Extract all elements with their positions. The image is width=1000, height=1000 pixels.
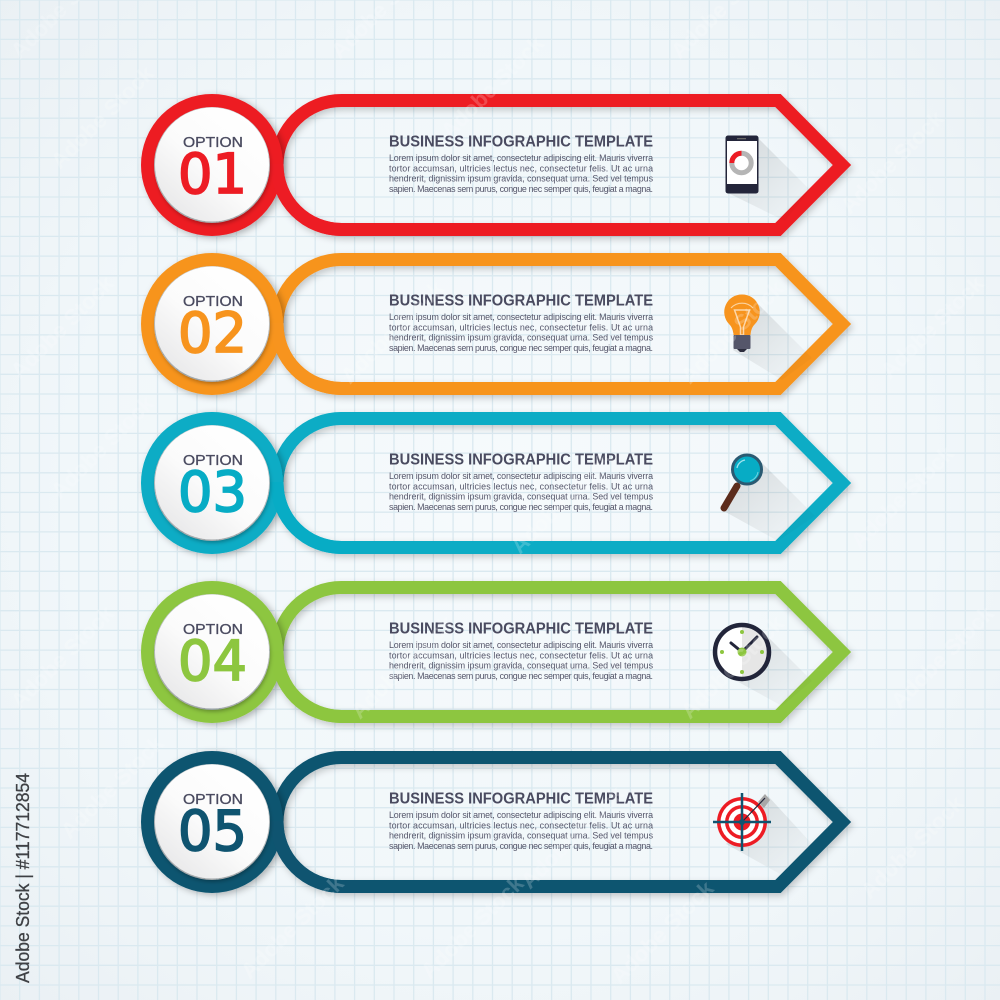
number 05: 05 xyxy=(178,799,247,863)
watermark text: Adobe Stock xyxy=(886,600,999,714)
disc 05 xyxy=(155,764,269,878)
option label 01: OPTION xyxy=(183,134,243,151)
watermark text: Adobe Stock xyxy=(606,875,719,989)
watermark text: Adobe Stock xyxy=(846,440,959,554)
option 04 row xyxy=(148,588,842,716)
watermark text: Adobe Stock xyxy=(516,780,629,894)
body text 01: Lorem ipsum dolor sit amet, consectetur adipiscing elit. Mauris viverra xyxy=(389,153,653,163)
option label 05: OPTION xyxy=(183,791,243,808)
watermark text: Adobe Stock xyxy=(876,270,989,384)
option label 03: OPTION xyxy=(183,452,243,469)
body text 05: tortor accumsan, ultricies lectus nec, consectetur felis. Ut ac urna xyxy=(389,820,653,830)
body text 02: hendrerit, dignissim ipsum gravida, consequat urna. Sed vel tempus xyxy=(389,333,654,343)
option 05 row xyxy=(148,758,842,886)
body text 05: sapien. Maecenas sem purus, congue nec semper quis, feugiat a magna. xyxy=(389,841,653,851)
body text 04: sapien. Maecenas sem purus, congue nec semper quis, feugiat a magna. xyxy=(389,671,653,681)
watermark text: Adobe Stock xyxy=(56,730,169,844)
body text 04: tortor accumsan, ultricies lectus nec, consectetur felis. Ut ac urna xyxy=(389,650,653,660)
ring 04 xyxy=(148,588,276,716)
ring 05 xyxy=(148,758,276,886)
watermark text: Adobe Stock xyxy=(676,610,789,724)
watermark text: Adobe Stock xyxy=(336,275,449,389)
number 03: 03 xyxy=(178,460,247,524)
body text 01 xyxy=(389,153,654,194)
ring 01 xyxy=(148,100,276,230)
disc 02 xyxy=(155,266,269,380)
option 02 row xyxy=(148,260,842,388)
body text 02: Lorem ipsum dolor sit amet, consectetur adipiscing elit. Mauris viverra xyxy=(389,312,653,322)
watermark text: Adobe Stock xyxy=(506,445,619,559)
body text 02: sapien. Maecenas sem purus, congue nec semper quis, feugiat a magna. xyxy=(389,343,653,353)
heading 01: BUSINESS INFOGRAPHIC TEMPLATE xyxy=(389,134,653,150)
arrow overlap 05 xyxy=(276,821,341,893)
arrow outline 01 xyxy=(277,100,842,230)
arrow outline 03 xyxy=(277,418,842,548)
body text 01: hendrerit, dignissim ipsum gravida, consequat urna. Sed vel tempus xyxy=(389,174,654,184)
body text 02: tortor accumsan, ultricies lectus nec, consectetur felis. Ut ac urna xyxy=(389,322,653,332)
watermark text: Adobe Stock xyxy=(856,790,969,904)
body text 04: hendrerit, dignissim ipsum gravida, consequat urna. Sed vel tempus xyxy=(389,661,654,671)
arrow outline 05 xyxy=(277,758,842,886)
body text 03: hendrerit, dignissim ipsum gravida, consequat urna. Sed vel tempus xyxy=(389,492,654,502)
body text 04 xyxy=(389,640,654,681)
heading 02: BUSINESS INFOGRAPHIC TEMPLATE xyxy=(389,292,653,310)
heading 05: BUSINESS INFOGRAPHIC TEMPLATE xyxy=(389,790,653,808)
disc 03 xyxy=(155,426,269,540)
watermark text: Adobe Stock xyxy=(6,600,119,714)
number 02: 02 xyxy=(178,301,247,365)
option 03 row xyxy=(148,418,842,548)
body text 04: Lorem ipsum dolor sit amet, consectetur adipiscing elit. Mauris viverra xyxy=(389,640,653,650)
arrow outline 02 xyxy=(277,260,842,388)
number 04: 04 xyxy=(178,629,247,693)
arrow overlap 01 xyxy=(276,164,341,236)
option label 02: OPTION xyxy=(183,293,243,310)
option 01 row xyxy=(148,100,842,230)
watermark text: Adobe Stock xyxy=(416,870,529,984)
icon: target xyxy=(713,793,812,874)
body text 01: sapien. Maecenas sem purus, congue nec semper quis, feugiat a magna. xyxy=(389,184,653,194)
body text 03 xyxy=(389,471,654,512)
watermark text: Adobe Stock xyxy=(46,390,159,504)
arrow outline 04 xyxy=(277,588,842,716)
ring 03 xyxy=(148,418,276,548)
watermark text: Adobe Stock xyxy=(676,275,789,389)
body text 03: tortor accumsan, ultricies lectus nec, consectetur felis. Ut ac urna xyxy=(389,481,653,491)
arrow overlap 02 xyxy=(276,323,341,395)
stock id side label: Adobe Stock | #117712854 xyxy=(13,773,33,983)
disc 04 xyxy=(155,594,269,708)
body text 03: Lorem ipsum dolor sit amet, consectetur adipiscing elit. Mauris viverra xyxy=(389,471,653,481)
heading 03: BUSINESS INFOGRAPHIC TEMPLATE xyxy=(389,452,653,468)
body text 03: sapien. Maecenas sem purus, congue nec semper quis, feugiat a magna. xyxy=(389,502,653,512)
disc 01 xyxy=(155,108,269,222)
watermark text: Adobe Stock xyxy=(346,610,459,724)
arrow overlap 03 xyxy=(276,482,341,554)
body text 05: hendrerit, dignissim ipsum gravida, consequat urna. Sed vel tempus xyxy=(389,831,654,841)
icon: magnifying glass xyxy=(722,455,815,541)
body text 05 xyxy=(389,810,654,851)
watermark text: Adobe Stock xyxy=(236,870,349,984)
watermark text: Adobe Stock xyxy=(6,270,119,384)
body text 02 xyxy=(389,312,654,353)
watermark text: Adobe Stock xyxy=(436,30,549,144)
icon: clock xyxy=(715,625,812,706)
arrow overlap 04 xyxy=(276,651,341,723)
watermark text: Adobe Stock xyxy=(46,60,159,174)
number 01: 01 xyxy=(178,142,247,206)
watermark text: Adobe Stock xyxy=(836,105,949,219)
heading 04: BUSINESS INFOGRAPHIC TEMPLATE xyxy=(389,620,653,638)
ring 02 xyxy=(148,260,276,388)
option label 04: OPTION xyxy=(183,621,243,638)
body text 05: Lorem ipsum dolor sit amet, consectetur adipiscing elit. Mauris viverra xyxy=(389,810,653,820)
icon: smartphone xyxy=(726,136,810,221)
icon: light bulb xyxy=(724,294,812,380)
body text 01: tortor accumsan, ultricies lectus nec, consectetur felis. Ut ac urna xyxy=(389,163,653,173)
